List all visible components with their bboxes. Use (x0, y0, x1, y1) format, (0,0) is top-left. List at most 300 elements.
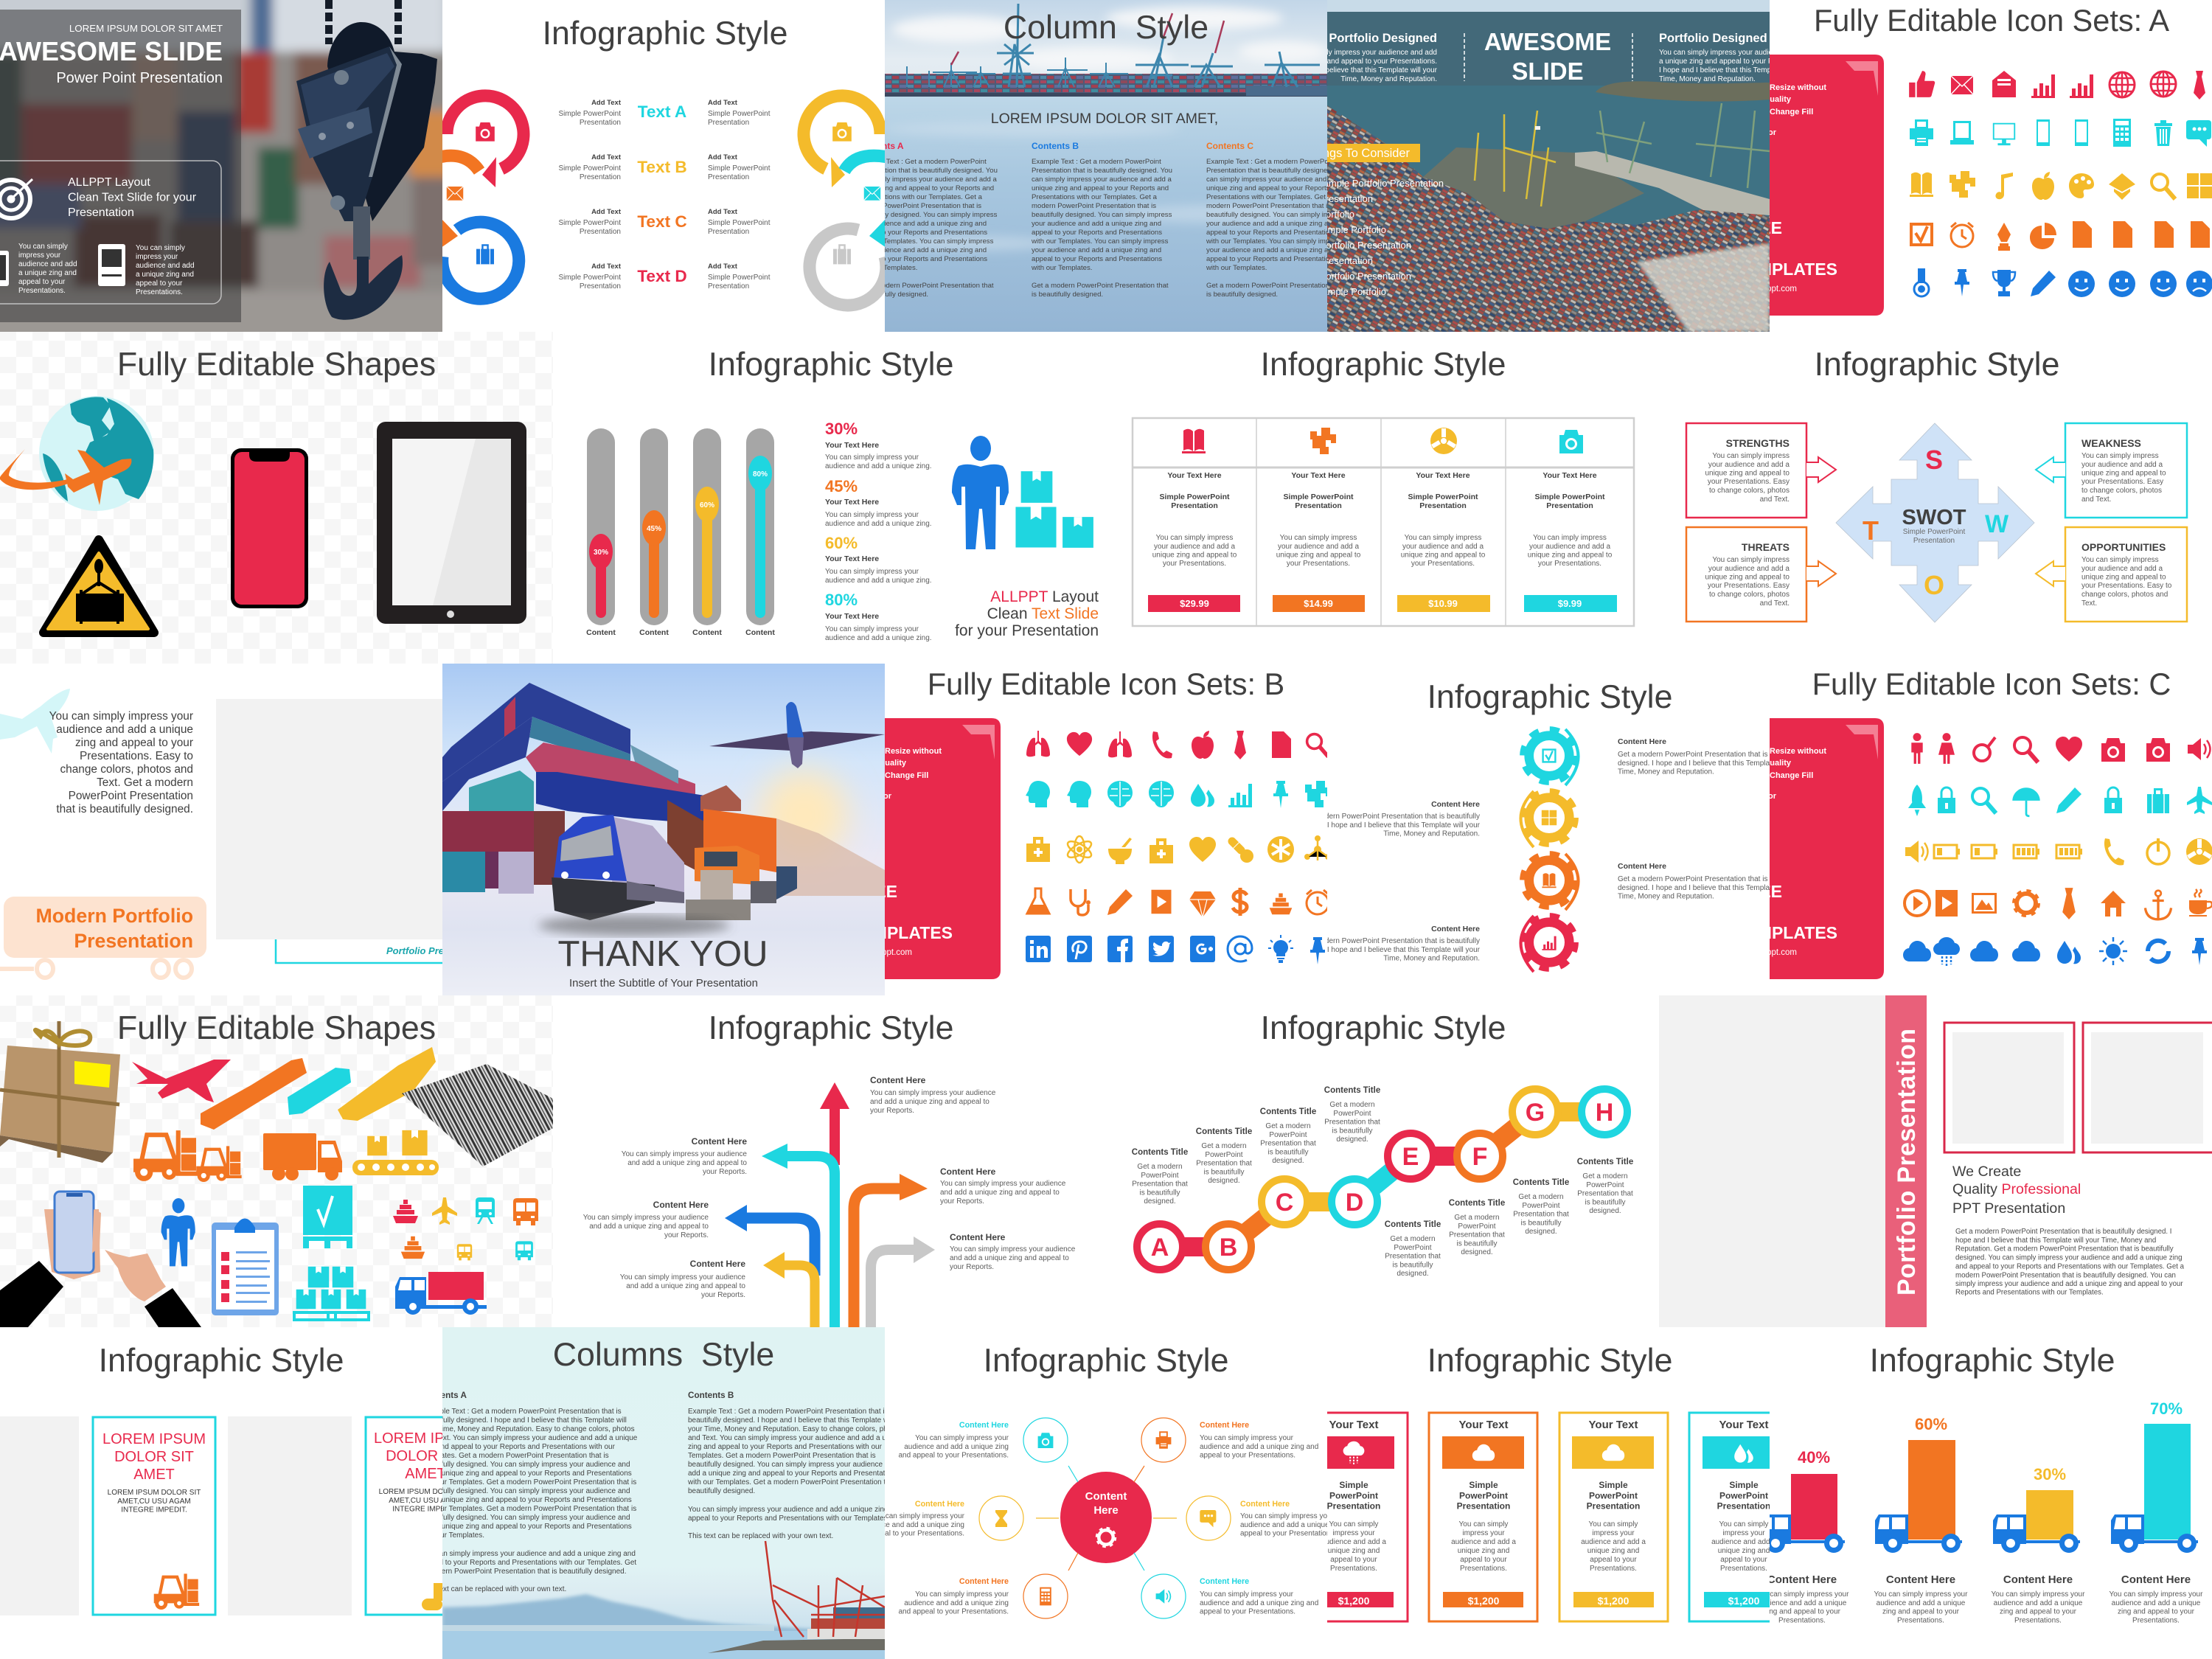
arrow: red (820, 1082, 849, 1165)
yellow label (1306, 144, 1420, 162)
blue person (161, 1198, 195, 1266)
checker background (0, 995, 553, 1327)
text: gear 3 (1618, 862, 1805, 901)
panel text: Resize without (885, 747, 942, 756)
text: left upper: Content Here (959, 1421, 1009, 1430)
card orange: Presentation (1457, 1501, 1510, 1512)
container stack (442, 683, 741, 894)
column A text: zing and appeal to your Reports and Presentations with our (421, 1443, 616, 1451)
node G (1512, 1089, 1558, 1135)
card red: audience and add a (1321, 1538, 1386, 1546)
column text A: your audience and add a unique zing and (857, 220, 987, 228)
card orange: audience and add a (1451, 1538, 1516, 1546)
node F (1457, 1133, 1503, 1179)
slide: fully editable shapes 2 logistics (0, 995, 553, 1327)
column text A: can simply impress your audience and add a (857, 175, 998, 184)
card yellow: impress your (1592, 1529, 1635, 1537)
red side panel (1736, 55, 1884, 316)
column A text: This text can be replaced with your own text. (421, 1585, 566, 1593)
card orange: Simple (1469, 1480, 1498, 1490)
text: layout: Clean Text Slide for your (68, 192, 197, 204)
text: top right: and add a unique zing and appeal to (870, 1098, 990, 1106)
text: right upper (1200, 1421, 1318, 1460)
slide: awesome slide cover with crane hook (0, 0, 457, 350)
gauge cyan: 80% (753, 470, 768, 479)
right text block: Portfolio Designed (1659, 32, 1767, 45)
row D: Add Text (708, 262, 738, 271)
node B: B (1220, 1234, 1237, 1262)
icon row: orange (1905, 888, 2212, 919)
text: yellow: You can simply impress your audience (620, 1273, 745, 1281)
strengths box: and Text. (1760, 495, 1790, 504)
slide: modern portfolio (0, 689, 487, 978)
text G: Get a modern (1518, 1193, 1564, 1201)
strengths box: to change colors, photos (1709, 487, 1790, 495)
card red: Your Text (1329, 1419, 1378, 1431)
column 1 text: unique zing and appeal to (1152, 552, 1237, 559)
column B text: Templates. Get a modern PowerPoint Presentation that is (688, 1452, 876, 1460)
legend 45%: audience and add a unique zing. (825, 520, 932, 528)
legend 45%: Your Text Here (825, 498, 879, 507)
slide: columns style over light sky and port (420, 1327, 905, 1659)
arrow: gray (871, 1237, 935, 1327)
slide: lorem ipsum cards (0, 1343, 477, 1615)
title: Infographic Style (984, 1343, 1228, 1379)
column text C: Presentation that is beautifully designed. You (1206, 167, 1347, 175)
card orange: Your Text (1459, 1419, 1508, 1431)
card 1 (93, 1417, 215, 1615)
column 3 text: unique zing and appeal to (1401, 552, 1486, 559)
spoke arrows (1036, 1466, 1177, 1571)
gauge yellow (693, 428, 721, 625)
row A: Simple PowerPoint (559, 110, 621, 118)
weakness box (2036, 423, 2187, 518)
column text B: Presentations with our Templates. Get a (1032, 193, 1158, 201)
column A text: with our Templates. Get a modern PowerPoint Presentation that is (420, 1505, 636, 1513)
icon row: red (1909, 71, 2205, 100)
column text C: appeal to your Reports and Presentations (1206, 229, 1337, 237)
text D: designed. (1336, 1135, 1368, 1144)
icon row: blue (1026, 935, 1325, 964)
threats box: unique zing and appeal to (1705, 574, 1790, 582)
node chat (1186, 1496, 1231, 1540)
column text A: Presentations with our Templates. Get a (857, 193, 983, 201)
text A: Get a modern (1137, 1163, 1183, 1171)
clipboard (212, 1218, 279, 1315)
gear cyan (1523, 729, 1578, 785)
SWOT label (1902, 506, 1966, 545)
text: gray: your Reports. (950, 1263, 994, 1271)
column 3 text: Your Text Here (1416, 471, 1470, 480)
water (885, 96, 1327, 332)
central red circle (1060, 1472, 1152, 1563)
quay with containers (885, 74, 1327, 97)
text C: is beautifully (1267, 1148, 1309, 1156)
pier (1575, 151, 1770, 215)
threats box: and Text. (1760, 599, 1790, 608)
slide: thank you photo (442, 664, 885, 995)
slide: infographic progress bars (586, 347, 1099, 642)
caption 1: zing and appeal to your (1764, 1607, 1841, 1616)
card cyan: unique zing and (1718, 1547, 1770, 1555)
caption 4 (2110, 1573, 2203, 1625)
card red: appeal to your (1330, 1556, 1377, 1564)
text C: PowerPoint (1269, 1131, 1307, 1139)
row B: Simple PowerPoint (559, 164, 621, 173)
body text: Reports and Presentations with our Templates. (1955, 1289, 2104, 1297)
circular arrow: red (447, 96, 524, 187)
text: gray: You can simply impress your audience (950, 1245, 1076, 1253)
caption 3: zing and appeal to your (2000, 1607, 2077, 1616)
text E (1385, 1220, 1441, 1278)
text F: designed. (1461, 1248, 1493, 1256)
legend 60%: 60% (825, 534, 858, 552)
column text B: Presentation that is beautifully designed. You (1032, 167, 1172, 175)
text B: Contents Title (1196, 1127, 1252, 1136)
column A text: with our Templates. (420, 1531, 484, 1540)
table grid (1133, 418, 1634, 626)
warning sign with suspended load (44, 540, 154, 633)
bullet list: Sample Portfolio (1316, 224, 1386, 235)
legend 60%: Your Text Here (825, 554, 879, 563)
row C: Add Text (708, 208, 738, 216)
legend 30% (825, 420, 932, 470)
text C (1260, 1107, 1316, 1165)
SWOT cross (1836, 423, 2034, 622)
icon: envelope cyan (864, 187, 880, 201)
card cyan: Your Text (1719, 1419, 1768, 1431)
card yellow: PowerPoint (1589, 1491, 1638, 1501)
slide: infographic hub and spokes (854, 1343, 1359, 1618)
right text block: Time, Money and Reputation. (1659, 75, 1756, 83)
title: Infographic Style (709, 1010, 953, 1046)
text: gear 3: designed. I hope and I believe that this Template will your (1618, 884, 1805, 892)
heading: awesome slide: AWESOME (1484, 28, 1611, 55)
subtitle: Insert the Subtitle of Your Presentation (569, 977, 758, 990)
plane swoosh (0, 449, 70, 490)
column text C: can simply impress your audience and add a (1206, 175, 1347, 184)
dashed dividers (1464, 33, 1632, 81)
paragraph: Presentations. Easy to (80, 750, 193, 762)
text E: is beautifully (1392, 1261, 1433, 1269)
gauge labels: Content (745, 628, 775, 637)
title: Fully Editable Icon Sets: B (928, 667, 1284, 701)
gear orange (1523, 854, 1578, 910)
text: blue: You can simply impress your audience (583, 1214, 709, 1222)
card orange: $1,200 (1468, 1595, 1500, 1607)
panel text: Change Fill (1770, 771, 1813, 780)
text D: Get a modern (1329, 1101, 1375, 1109)
caption 4: You can simply impress your (2110, 1590, 2203, 1599)
column text B: Example Text : Get a modern PowerPoint (1032, 158, 1161, 166)
slide: fully editable shapes 1 (0, 332, 553, 664)
icon row: blue (1903, 937, 2207, 966)
text: gear 2: designed. I hope and I believe that this Template will your (1293, 821, 1481, 830)
slide: fully editable icon sets B (851, 667, 1331, 979)
crane hook (296, 0, 437, 320)
column A text: a modern PowerPoint Presentation that is beautifully designed. (421, 1568, 627, 1576)
column text B: your audience and add a unique zing and (1032, 220, 1161, 228)
text: gray: Content Here (950, 1232, 1006, 1242)
frame 1 (1944, 1023, 2074, 1152)
column text A: Presentation that is beautifully designed. You (857, 167, 998, 175)
text G: Presentation that (1513, 1211, 1569, 1219)
column 2 text: Your Text Here (1291, 471, 1346, 480)
heading: Quality Professional (1952, 1181, 2081, 1197)
icon: suitcase (476, 244, 494, 264)
barcode (402, 1064, 553, 1166)
text: right lower: audience and add a unique zing and (1200, 1599, 1318, 1607)
row D (559, 262, 771, 291)
body text: designed. You can simply impress your audience and add a unique zing (1955, 1253, 2183, 1262)
text: right lower: appeal to your Presentations. (1200, 1607, 1295, 1616)
body text: and appeal to your Reports and Presentations with our Templates. Get a (1955, 1262, 2185, 1270)
node E: E (1402, 1143, 1419, 1171)
body text: Reputation. Get a modern PowerPoint Presentation that is beautifully (1955, 1245, 2174, 1253)
column text C: appeal to your Reports and Presentations (1206, 255, 1337, 263)
text B: Presentation that (1196, 1160, 1252, 1168)
text G: designed. (1525, 1228, 1557, 1236)
column 4 text (1528, 471, 1613, 568)
truck bar 70%: 70% (2150, 1399, 2183, 1418)
text: orange (940, 1166, 1066, 1206)
node calculator (1023, 1574, 1068, 1618)
text: left lower: You can simply impress your (915, 1590, 1009, 1599)
globe with plane (0, 396, 154, 511)
threats box: You can simply impress (1712, 556, 1790, 564)
text: right upper: audience and add a unique zing and (1200, 1443, 1318, 1451)
column 2 text: your Presentations. (1287, 560, 1350, 568)
table icons (1182, 428, 1583, 454)
title: Infographic Style (543, 15, 787, 52)
caption 3: Content Here (2003, 1573, 2073, 1586)
text: cyan: your Reports. (703, 1168, 747, 1176)
text G: is beautifully (1520, 1219, 1562, 1227)
icon row: cyan (1908, 785, 2212, 816)
text: layout: ALLPPT Layout (68, 176, 150, 189)
column text C: unique zing and appeal to your Reports and (1206, 184, 1343, 192)
row C: Simple PowerPoint (708, 219, 771, 227)
panel text: allppt.com (874, 948, 912, 957)
column text B: beautifully designed. You can simply impress (1032, 211, 1172, 219)
icon row: orange (1910, 221, 2210, 251)
row C: Simple PowerPoint (559, 219, 621, 227)
text D: is beautifully (1332, 1127, 1373, 1135)
node megaphone (1141, 1574, 1186, 1618)
bullet list: Presentation (1319, 193, 1373, 204)
text A: designed. (1144, 1197, 1176, 1206)
column A text: Templates. Get a modern PowerPoint Presentation that is (421, 1452, 609, 1460)
text B: PowerPoint (1205, 1151, 1243, 1159)
text: right middle: You can simply impress your (1240, 1512, 1335, 1520)
text: left lower: and appeal to your Presentations. (898, 1607, 1009, 1616)
card red: Simple (1339, 1480, 1368, 1490)
panel text: Color (1755, 128, 1777, 137)
text: blue: and add a unique zing and appeal to (589, 1222, 709, 1231)
heading: lorem ipsum: LOREM IPSUM DOLOR SIT AMET (69, 23, 223, 34)
legend 80%: 80% (825, 591, 858, 609)
letter O: O (1924, 570, 1944, 600)
node hourglass (979, 1496, 1023, 1540)
column text A: beautifully designed. You can simply impress (857, 211, 998, 219)
text: gear 2: Get a modern PowerPoint Presentation that is beautifully (1295, 813, 1480, 821)
heading: awesome slide: SLIDE (1512, 58, 1584, 85)
text B: designed. (1208, 1177, 1240, 1185)
text A: Contents Title (1132, 1148, 1188, 1157)
text E: Contents Title (1385, 1220, 1441, 1229)
weakness box: your Presentations. Easy (2081, 478, 2163, 486)
left text block: I hope and I believe that this Template will your (1284, 66, 1438, 74)
opportunities box: OPPORTUNITIES (2081, 541, 2166, 553)
text A (1132, 1148, 1188, 1206)
column A text: beautifully designed. You can simply impress your audience and (421, 1461, 630, 1469)
small text column 1: impress your (18, 251, 61, 260)
icon row: red (1911, 733, 2211, 764)
column 2 text: You can simply impress (1280, 534, 1357, 542)
node E (1388, 1133, 1433, 1179)
text: yellow: Content Here (690, 1259, 745, 1269)
column A text: add a unique zing and appeal to your Reports and Presentations (421, 1470, 632, 1478)
weakness box: your audience and add a (2081, 461, 2163, 469)
frame 2 (2083, 1023, 2212, 1152)
text H: is beautifully (1585, 1198, 1626, 1206)
column A text: appeal to your Reports and Presentations with our Templates. Get (421, 1559, 636, 1567)
column 3 text (1401, 471, 1486, 568)
row A (559, 99, 771, 127)
column B text: Example Text : Get a modern PowerPoint Presentation that is (688, 1408, 888, 1416)
legend 45%: 45% (825, 477, 858, 495)
text: gear 3: Get a modern PowerPoint Presentation that is beautifully (1618, 875, 1803, 883)
column text C: Get a modern PowerPoint Presentation that (1206, 282, 1343, 290)
paragraph: PowerPoint Presentation (69, 790, 193, 802)
water ripples (885, 122, 1312, 251)
column text C: with our Templates. (1206, 264, 1267, 272)
card yellow: unique zing and (1587, 1547, 1639, 1555)
column 3 text: Simple PowerPoint (1408, 493, 1478, 501)
opportunities box: unique zing and appeal to (2081, 574, 2166, 582)
caption 2: You can simply impress your (1874, 1590, 1968, 1599)
card 2: INTEGRE IMPEDIT. (392, 1506, 459, 1513)
truck bar 60%: 60% (1915, 1415, 1947, 1433)
body text: hope and I believe that this Template will your Time, Money and (1955, 1237, 2156, 1245)
column 1 text: Presentation (1171, 501, 1218, 510)
sky strip (1327, 0, 1770, 12)
text D: Contents Title (1324, 1086, 1380, 1095)
left text block: You can simply impress your audience and add (1283, 49, 1437, 57)
yellow cranes (1475, 111, 1556, 206)
row C: Presentation (580, 228, 621, 236)
column text B: modern PowerPoint Presentation that is (1032, 202, 1156, 210)
column text A: is beautifully designed. (857, 291, 928, 299)
weakness box: unique zing and appeal to (2081, 470, 2166, 478)
gray photo placeholder (1659, 995, 1885, 1327)
text: gear 4: Time, Money and Reputation. (1383, 954, 1480, 963)
column A text: and Text. You can simply impress your audience and add a unique (421, 1434, 638, 1442)
text: left middle: Content Here (915, 1500, 964, 1509)
text: right lower: You can simply impress your (1200, 1590, 1294, 1599)
slide: infographic weather price cards (1299, 1343, 1798, 1621)
gauge red (587, 428, 615, 625)
column heading A: Contents A (857, 141, 904, 151)
bullet list: Sample Portfolio (1316, 286, 1386, 297)
text E: PowerPoint (1394, 1244, 1432, 1252)
threats box: your Presentations. Easy (1708, 582, 1790, 590)
node A: A (1151, 1234, 1169, 1262)
blue truck with red box (395, 1272, 487, 1315)
gauge cyan (746, 428, 774, 625)
right text block: I hope and I believe that this Template will your (1659, 66, 1812, 74)
checker background (0, 332, 553, 664)
text F: Presentation that (1449, 1231, 1505, 1239)
text: left upper: You can simply impress your (915, 1434, 1009, 1442)
gauge labels: Content (639, 628, 669, 637)
weakness box: You can simply impress (2081, 452, 2159, 460)
card cyan: PowerPoint (1719, 1491, 1768, 1501)
gauge red: 30% (594, 549, 608, 557)
column text B: appeal to your Reports and Presentations (1032, 229, 1162, 237)
bullet list: Portfolio Presentation (1320, 240, 1411, 251)
paragraph: change colors, photos and (60, 763, 193, 776)
column 1 text: Your Text Here (1167, 471, 1222, 480)
truck bar 40% (1758, 1448, 1845, 1553)
chain connectors (1160, 1112, 1604, 1247)
text: yellow: your Reports. (701, 1291, 745, 1299)
text E: designed. (1397, 1270, 1429, 1278)
text: cyan: You can simply impress your audience (622, 1150, 747, 1158)
text: orange: Content Here (940, 1166, 996, 1177)
slide: infographic truck bar chart (1756, 1343, 2203, 1625)
panel text: TEMPLATES (851, 923, 953, 942)
card orange: appeal to your (1460, 1556, 1507, 1564)
bullet list: Sample Portfolio Presentation (1317, 178, 1444, 189)
caption 2 (1874, 1573, 1968, 1625)
red plane (132, 1060, 231, 1102)
truck wheels (0, 960, 192, 978)
panel text: Quality (879, 759, 907, 768)
row A: Add Text (708, 99, 738, 107)
card 2: AMET,CU USU AGAM (389, 1497, 462, 1505)
column B text: with our Templates. Get a modern PowerPoint Presentation that is (687, 1478, 903, 1486)
card cyan: Simple (1729, 1480, 1759, 1490)
paragraph: Text. Get a modern (97, 776, 193, 789)
card orange: Presentations. (1460, 1565, 1507, 1573)
gauge yellow: 60% (700, 501, 714, 509)
price 9.99 (1524, 595, 1617, 612)
clouds (892, 7, 1327, 71)
caption 2: zing and appeal to your (1882, 1607, 1960, 1616)
column text C: your audience and add a unique zing and (1206, 246, 1336, 254)
truck bar 40%: 40% (1798, 1448, 1830, 1467)
row D: Presentation (708, 282, 749, 291)
text: gear 4: Content Here (1431, 925, 1480, 933)
row A: Text A (638, 102, 686, 121)
person with boxes (952, 436, 1093, 549)
heading: awesome slide: AWESOME SLIDE (0, 36, 223, 66)
card red: impress your (1332, 1529, 1375, 1537)
column text A: modern PowerPoint Presentation that is (857, 202, 981, 210)
caption 3: You can simply impress your (1992, 1590, 2085, 1599)
column 2 text: Simple PowerPoint (1283, 493, 1354, 501)
small text column 2: audience and add (136, 262, 195, 270)
row B: Add Text (591, 153, 622, 161)
arrow: yellow (763, 1252, 815, 1327)
text: gear 1: Content Here (1618, 737, 1666, 746)
right text block (1659, 32, 1815, 83)
person (952, 436, 1009, 549)
truck label: Presentation (74, 930, 193, 952)
globe (39, 396, 154, 511)
title: Infographic Style (99, 1343, 344, 1379)
